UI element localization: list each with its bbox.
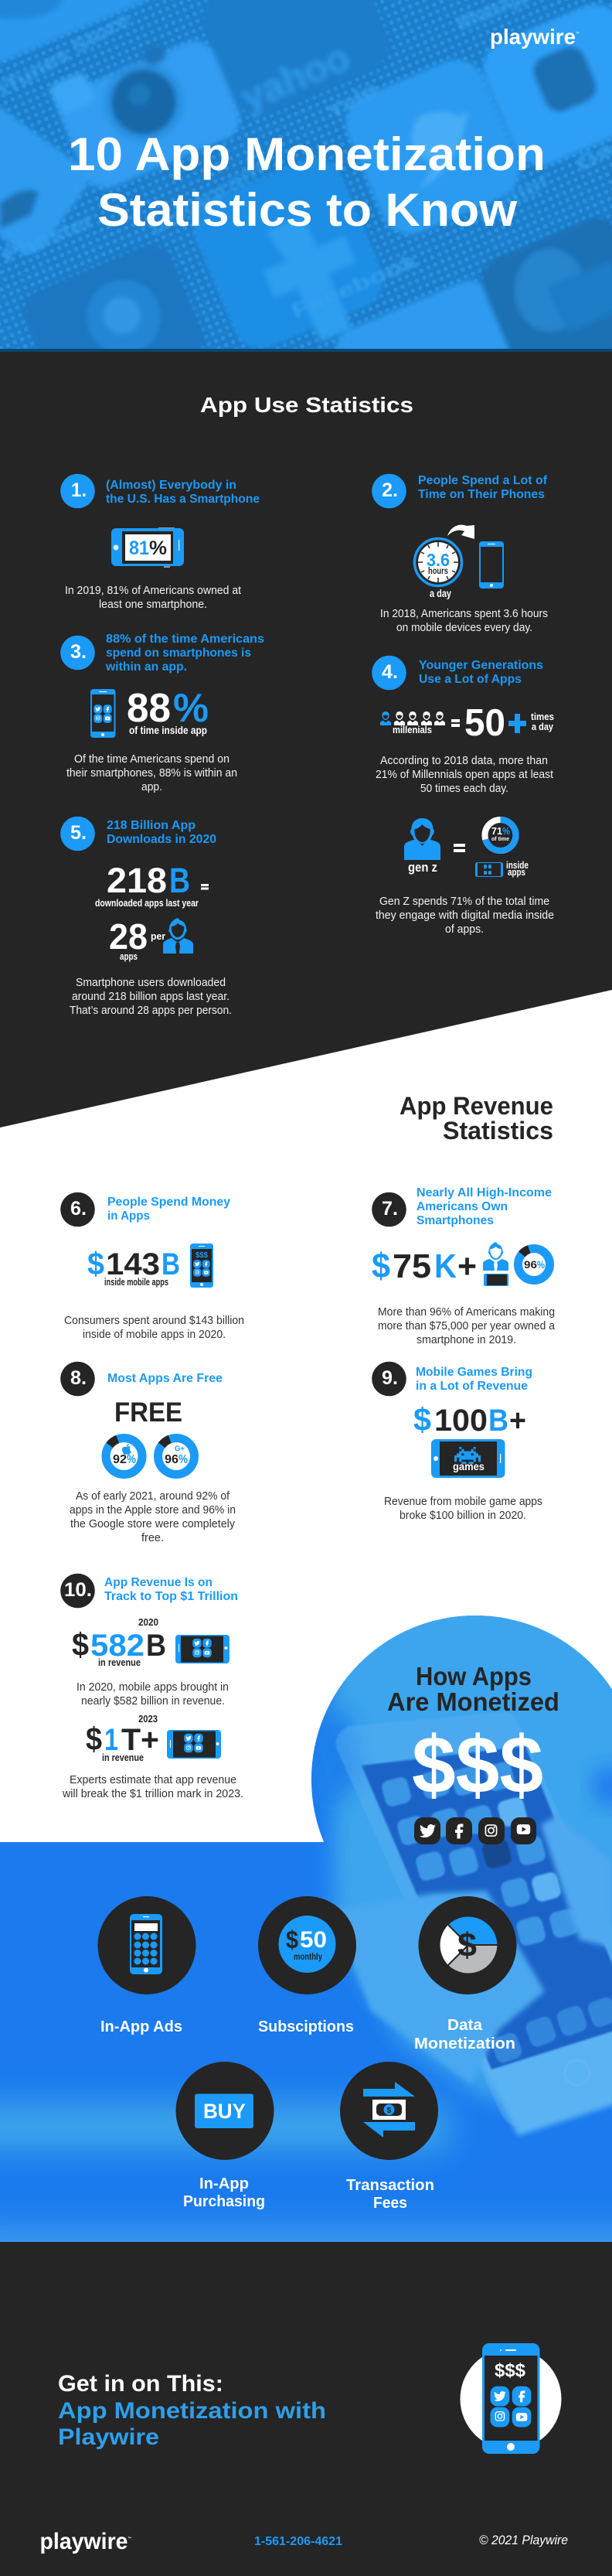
- item: In-App Purchasing: Purchasing: [183, 2193, 265, 2210]
- body text 10b: Experts estimate that app revenue: [70, 1774, 236, 1786]
- stat: $75K+: $: [372, 1246, 390, 1285]
- panel: stat 1 smartphone: [60, 474, 260, 611]
- body text 10a: [76, 1681, 229, 1708]
- stat: 218B downloads: 218: [107, 861, 167, 900]
- stat: $143B: inside mobile apps: [104, 1277, 168, 1288]
- header photo background: Facebook: [288, 248, 422, 323]
- icon: BUY button: [195, 2094, 253, 2128]
- donut: 71% of time: [485, 820, 516, 851]
- icon: pie with dollar: $: [457, 1926, 477, 1964]
- stat: 88% of time inside app: %: [173, 686, 209, 731]
- stat: $75K+: [372, 1246, 477, 1285]
- header photo background: Phoster: [0, 208, 97, 268]
- icon: tablet inside apps: inside: [506, 860, 529, 871]
- icon: gen z person: gen z: [408, 860, 437, 875]
- body text 5: [70, 977, 232, 1017]
- phone screen: [362, 1746, 612, 2069]
- stat: 2023 $1T+ in revenue: T+: [121, 1723, 159, 1757]
- heading 5: Downloads in 2020: [107, 833, 216, 846]
- heading: call to action: Playwire: [58, 2424, 159, 2450]
- donut: 96%: %: [537, 1258, 545, 1271]
- heading: How Apps Are Monetized: [387, 1662, 559, 1716]
- number badge 4: 4.: [382, 661, 398, 683]
- logo: playwire footer: ™: [128, 2537, 131, 2541]
- number badge 9: 9.: [382, 1367, 398, 1389]
- icon: $50 monthly: $: [286, 1926, 298, 1953]
- heading 2: People Spend a Lot of: [418, 474, 548, 487]
- heading 9: Mobile Games Bring: [416, 1366, 532, 1379]
- social icons row: [414, 1817, 536, 1844]
- stat: $143B: 143: [106, 1247, 160, 1281]
- panel: stat 2 time on phones: [372, 474, 548, 634]
- body text 3: their smartphones, 88% is within an: [66, 767, 237, 780]
- body text 10a: nearly $582 billion in revenue.: [81, 1695, 225, 1708]
- copyright: © 2021 Playwire: [479, 2533, 568, 2547]
- heading 4: Younger Generations: [419, 659, 543, 672]
- body text 10b: will break the $1 trillion mark in 2023.: [62, 1788, 243, 1800]
- stat: 2020 $582B in revenue: [72, 1617, 166, 1668]
- stat: 2023 $1T+ in revenue: 1: [104, 1723, 118, 1757]
- stat: 88% of time inside app: [127, 686, 209, 736]
- body text 2: [380, 608, 548, 634]
- donut: 71% of time: %: [502, 826, 510, 837]
- panel: stat 6 spend money: [60, 1192, 244, 1341]
- number badge 8: 8.: [70, 1367, 87, 1389]
- header photo background: Yelp: [323, 77, 382, 124]
- icon: clock 3.6 hours: 3.6: [427, 550, 450, 570]
- number badge 5: 5.: [70, 822, 87, 844]
- number badge 9: [372, 1362, 406, 1396]
- stat: 2023 $1T+ in revenue: $: [86, 1721, 102, 1757]
- heading 6: [107, 1196, 230, 1223]
- stat: $100B+: +: [509, 1404, 526, 1438]
- donut: 96%: 96: [524, 1258, 537, 1271]
- icon: phone on white circle: [461, 2343, 561, 2454]
- stat: 2020 $582B in revenue: 2020: [138, 1617, 158, 1628]
- body text 8: free.: [141, 1532, 164, 1544]
- stat: $143B: B: [162, 1247, 180, 1281]
- panel: stat 5 downloads: [60, 817, 232, 1017]
- body text 4b: of apps.: [445, 923, 484, 936]
- icon: portrait phone: [479, 541, 504, 589]
- body text 1: [65, 585, 241, 611]
- icon: $50 monthly: monthly: [294, 1953, 322, 1962]
- body text 3: [66, 753, 237, 793]
- body text 9: [384, 1496, 542, 1522]
- item: In-App Ads: [97, 1896, 196, 2035]
- heading 7: [416, 1186, 552, 1227]
- stat: $75K+: K: [434, 1247, 457, 1285]
- title: 10 App Monetization: [68, 128, 546, 180]
- graphic: $$$: $$$: [412, 1720, 543, 1810]
- header photo background: Ga: [572, 136, 612, 176]
- equals sign: [454, 844, 465, 852]
- stat: 88% of time inside app: of time inside app: [129, 724, 207, 736]
- panel: blue monetization photo background: [0, 1593, 612, 2274]
- stat: 28 apps per person: per: [151, 930, 165, 942]
- number badge 6: 6.: [70, 1198, 87, 1220]
- dark section background with diagonal edge: [0, 352, 612, 1128]
- footer dark background: [0, 2242, 612, 2576]
- body text 8: apps in the Apple store and 96% in: [70, 1504, 236, 1517]
- icon: facebook: [446, 1817, 472, 1844]
- body text 7: [378, 1306, 556, 1346]
- heading: App Revenue Statistics: App Revenue: [400, 1092, 553, 1120]
- donut: Google 96%: 96: [165, 1453, 178, 1466]
- heading 3: spend on smartphones is: [106, 647, 251, 660]
- stat: $143B: $: [87, 1246, 104, 1281]
- phone number: 1-561-206-4621: [254, 2535, 342, 2548]
- item: In-App Ads: In-App Ads: [100, 2018, 182, 2035]
- heading 7: Nearly All High-Income: [416, 1186, 552, 1199]
- donut: Apple 92%: 92: [113, 1453, 127, 1466]
- heading: call to action: App Monetization with: [58, 2398, 326, 2424]
- header photo background: [0, 0, 612, 349]
- heading 1: [106, 479, 260, 506]
- heading 4: Use a Lot of Apps: [419, 673, 522, 686]
- heading: How Apps Are Monetized: Are Monetized: [387, 1687, 559, 1716]
- heading 6: People Spend Money: [107, 1196, 230, 1209]
- item: Data Monetization: Monetization: [414, 2035, 515, 2052]
- heading 10: App Revenue Is on: [104, 1576, 212, 1589]
- body text 1: In 2019, 81% of Americans owned at: [65, 585, 241, 597]
- number badge 10: 10.: [64, 1579, 92, 1601]
- number badge 7: 7.: [382, 1198, 398, 1220]
- number badge 4: [372, 656, 406, 690]
- hand fingers: [332, 1891, 545, 2084]
- item: Data Monetization: [414, 1896, 516, 2052]
- donut: Google 96%: G+: [175, 1445, 185, 1452]
- stat: 2020 $582B in revenue: $: [72, 1626, 89, 1663]
- icon: clock 3.6 hours: a day: [430, 588, 451, 599]
- stat: 28 apps per person: 28: [109, 916, 148, 957]
- panel: stat 7 high income: [372, 1186, 556, 1346]
- icon: $50 monthly: 50: [300, 1927, 327, 1953]
- phone body: [336, 1712, 612, 2126]
- icon: clock 3.6 hours: hours: [428, 565, 448, 576]
- icon: tablet with apps 2023: [167, 1730, 221, 1759]
- body text 8: As of early 2021, around 92% of: [76, 1490, 230, 1503]
- heading 10: [104, 1576, 238, 1603]
- stat: 50+ times a day: [464, 702, 554, 744]
- heading 2: Time on Their Phones: [418, 488, 545, 501]
- heading: App Revenue Statistics: [400, 1092, 553, 1145]
- body text 4b: Gen Z spends 71% of the total time: [379, 896, 549, 908]
- stat: 2020 $582B in revenue: B: [146, 1629, 166, 1663]
- heading 9: in a Lot of Revenue: [416, 1380, 528, 1393]
- stat: 2020 $582B in revenue: in revenue: [98, 1656, 141, 1668]
- icon: transaction arrows and banknote: [363, 2082, 415, 2138]
- stat: $100B+: B: [488, 1404, 508, 1438]
- number badge 1: [60, 474, 95, 508]
- body text 1: least one smartphone.: [99, 599, 207, 611]
- heading 3: within an app.: [105, 660, 187, 674]
- icon: phone with social apps: [90, 689, 116, 738]
- number badge 3: [60, 636, 95, 670]
- item: In-App Purchasing: In-App: [199, 2175, 249, 2192]
- icon: person in suit: [163, 918, 193, 954]
- stat: $100B+: 100: [434, 1404, 488, 1438]
- heading 2: [418, 474, 548, 501]
- stat: FREE: FREE: [114, 1397, 182, 1428]
- icon: landscape phone 81%: %: [149, 537, 167, 559]
- item: Subsciptions: Subsciptions: [258, 2018, 354, 2035]
- icon: BUY button: BUY: [203, 2100, 246, 2123]
- stat: 50+ times a day: times: [531, 711, 554, 722]
- body text 4: 21% of Millennials open apps at least: [376, 769, 553, 781]
- title: [68, 128, 546, 236]
- stat: $100B+: [413, 1401, 526, 1438]
- number badge 6: [60, 1192, 95, 1227]
- number badge 10: [60, 1574, 95, 1608]
- body text 2: on mobile devices every day.: [396, 622, 532, 634]
- stat: 50+ times a day: a day: [532, 721, 554, 732]
- heading: call to action: [58, 2371, 326, 2450]
- icon: phone with $$$: $$$: [196, 1251, 208, 1260]
- stat: 50+ times a day: 50: [464, 702, 505, 744]
- heading 8: Most Apps Are Free: [107, 1372, 223, 1385]
- panel: stat 10 revenue trillion: [60, 1574, 243, 1800]
- icon: person with tablet: [483, 1242, 508, 1286]
- body text 7: more than $75,000 per year owned a: [378, 1320, 556, 1332]
- body text 5: around 218 billion apps last year.: [72, 991, 230, 1003]
- donut: Apple 92%: [99, 1431, 149, 1482]
- item: Transaction Fees: Transaction: [346, 2177, 434, 2194]
- heading 7: Smartphones: [416, 1214, 494, 1227]
- body text 8: the Google store were completely: [70, 1518, 236, 1530]
- stat: 218B downloads: downloaded apps last year: [95, 898, 199, 909]
- body text 4: [376, 755, 553, 795]
- icon: instagram: [478, 1817, 505, 1844]
- body text 5: Smartphone users downloaded: [76, 977, 226, 989]
- logo: playwire header: playwire: [490, 25, 576, 49]
- panel: stat 9 mobile games: [372, 1362, 542, 1522]
- icon: landscape phone 81%: 81: [129, 537, 149, 559]
- heading 9: [416, 1366, 532, 1393]
- body text 7: More than 96% of Americans making: [378, 1306, 555, 1319]
- icon: twitter: [414, 1817, 440, 1844]
- heading 7: Americans Own: [416, 1200, 508, 1213]
- item: Transaction Fees: Fees: [373, 2195, 407, 2212]
- body text 3: app.: [141, 781, 162, 793]
- icon: $50 monthly: [278, 1916, 335, 1973]
- body text 6: Consumers spent around $143 billion: [64, 1315, 244, 1327]
- stat: 2023 $1T+ in revenue: [86, 1714, 159, 1763]
- white section background: [0, 990, 612, 1842]
- heading: App Revenue Statistics: Statistics: [443, 1117, 553, 1145]
- heading 6: in Apps: [107, 1210, 150, 1223]
- logo: playwire footer: playwire: [40, 2529, 128, 2554]
- stat: 2023 $1T+ in revenue: 2023: [138, 1714, 158, 1725]
- stat: $75K+: 75: [393, 1247, 431, 1285]
- icon: gen z person: [404, 818, 440, 875]
- donut: Google 96%: %: [178, 1453, 188, 1466]
- icon: pie with dollar: [440, 1917, 498, 1973]
- donut: 71% of time: of time: [491, 835, 509, 842]
- stat: $75K+: +: [457, 1247, 477, 1285]
- stat: 88% of time inside app: 88: [127, 686, 171, 731]
- equals sign: [451, 719, 460, 727]
- stat: 218B downloads: [95, 861, 209, 909]
- icon: phone with $$$: [190, 1244, 213, 1288]
- heading 1: (Almost) Everybody in: [106, 479, 236, 492]
- stat: 2020 $582B in revenue: 582: [90, 1629, 144, 1663]
- panel: stat 3 inside apps: [60, 633, 264, 793]
- body text 4b: they engage with digital media inside: [376, 909, 554, 922]
- icon: tablet with apps 2020: [175, 1635, 230, 1663]
- stat: 2023 $1T+ in revenue: in revenue: [102, 1752, 144, 1763]
- arrow: curved white: [447, 525, 474, 539]
- number badge 2: 2.: [382, 479, 398, 501]
- item: In-App Purchasing: [176, 2062, 274, 2210]
- stat: 28 apps per person: [109, 916, 193, 962]
- donut: Apple 92%: %: [127, 1453, 136, 1466]
- panel: stat 8 free apps: [60, 1362, 236, 1544]
- title: Statistics to Know: [97, 184, 517, 236]
- heading: How Apps Are Monetized: How Apps: [416, 1662, 532, 1691]
- icon: five millennials: [380, 711, 445, 735]
- icon: tablet with space invader: games: [453, 1460, 484, 1472]
- icon: five millennials: millenials: [393, 724, 432, 735]
- number badge 3: 3.: [70, 641, 87, 663]
- stat: 218B downloads: B: [169, 861, 190, 900]
- body text 8: [70, 1490, 236, 1544]
- body text 9: Revenue from mobile game apps: [384, 1496, 542, 1508]
- stat: $143B: [87, 1246, 180, 1288]
- number badge 7: [372, 1192, 406, 1227]
- icon: clock 3.6 hours: [414, 538, 462, 599]
- body text 5: That’s around 28 apps per person.: [70, 1005, 232, 1017]
- icon: keypad phone: [130, 1914, 162, 1974]
- icon: youtube: [511, 1817, 536, 1844]
- body text 4b: [376, 896, 554, 936]
- heading 3: 88% of the time Americans: [106, 633, 264, 646]
- heading 10: Track to Top $1 Trillion: [104, 1590, 238, 1603]
- body text 10b: [62, 1774, 243, 1800]
- icon: tablet inside apps: apps: [508, 867, 525, 878]
- header photo background: yahoo: [235, 35, 356, 119]
- heading 3: [105, 633, 264, 674]
- body text 6: [64, 1315, 244, 1341]
- icon: tablet inside apps: [475, 860, 529, 878]
- item: Subsciptions: [258, 1896, 356, 2035]
- number badge 5: [60, 817, 95, 851]
- body text 2: In 2018, Americans spent 3.6 hours: [380, 608, 548, 620]
- number badge 8: [60, 1362, 95, 1396]
- body text 6: inside of mobile apps in 2020.: [83, 1329, 226, 1341]
- icon: tablet with space invader: [431, 1439, 505, 1478]
- donut: Google 96%: [151, 1431, 202, 1482]
- logo: playwire header: ™: [576, 32, 580, 36]
- icon: landscape phone 81%: [111, 527, 184, 568]
- number badge 1: 1.: [71, 479, 87, 501]
- body text 4: 50 times each day.: [420, 783, 508, 795]
- header photo background: Twitter: [469, 167, 554, 232]
- stat: $100B+: $: [413, 1401, 431, 1438]
- panel: stat 4 younger generations: [372, 656, 554, 936]
- heading: call to action: Get in on This:: [58, 2371, 223, 2397]
- body text 9: broke $100 billion in 2020.: [400, 1510, 526, 1522]
- header photo background: Instagram: [145, 156, 267, 240]
- body text 3: Of the time Americans spend on: [74, 753, 230, 766]
- heading 5: [107, 819, 216, 846]
- icon: transaction arrows and banknote: $: [386, 2107, 392, 2115]
- stat: 28 apps per person: apps: [120, 951, 138, 962]
- body text 4: According to 2018 data, more than: [380, 755, 548, 767]
- body text 7: smartphone in 2019.: [416, 1334, 516, 1346]
- heading 5: 218 Billion App: [107, 819, 196, 832]
- heading 1: the U.S. Has a Smartphone: [106, 493, 260, 506]
- body text 10a: In 2020, mobile apps brought in: [76, 1681, 229, 1694]
- heading 4: [419, 659, 543, 686]
- donut: 71% of time: 71: [491, 826, 502, 837]
- heading: App Use Statistics: App Use Statistics: [200, 393, 413, 417]
- item: Transaction Fees: [340, 2062, 438, 2212]
- icon: phone on white circle: $$$: [495, 2360, 526, 2381]
- donut: 96%: [512, 1242, 556, 1287]
- item: Data Monetization: Data: [447, 2017, 483, 2034]
- number badge 2: [372, 474, 406, 508]
